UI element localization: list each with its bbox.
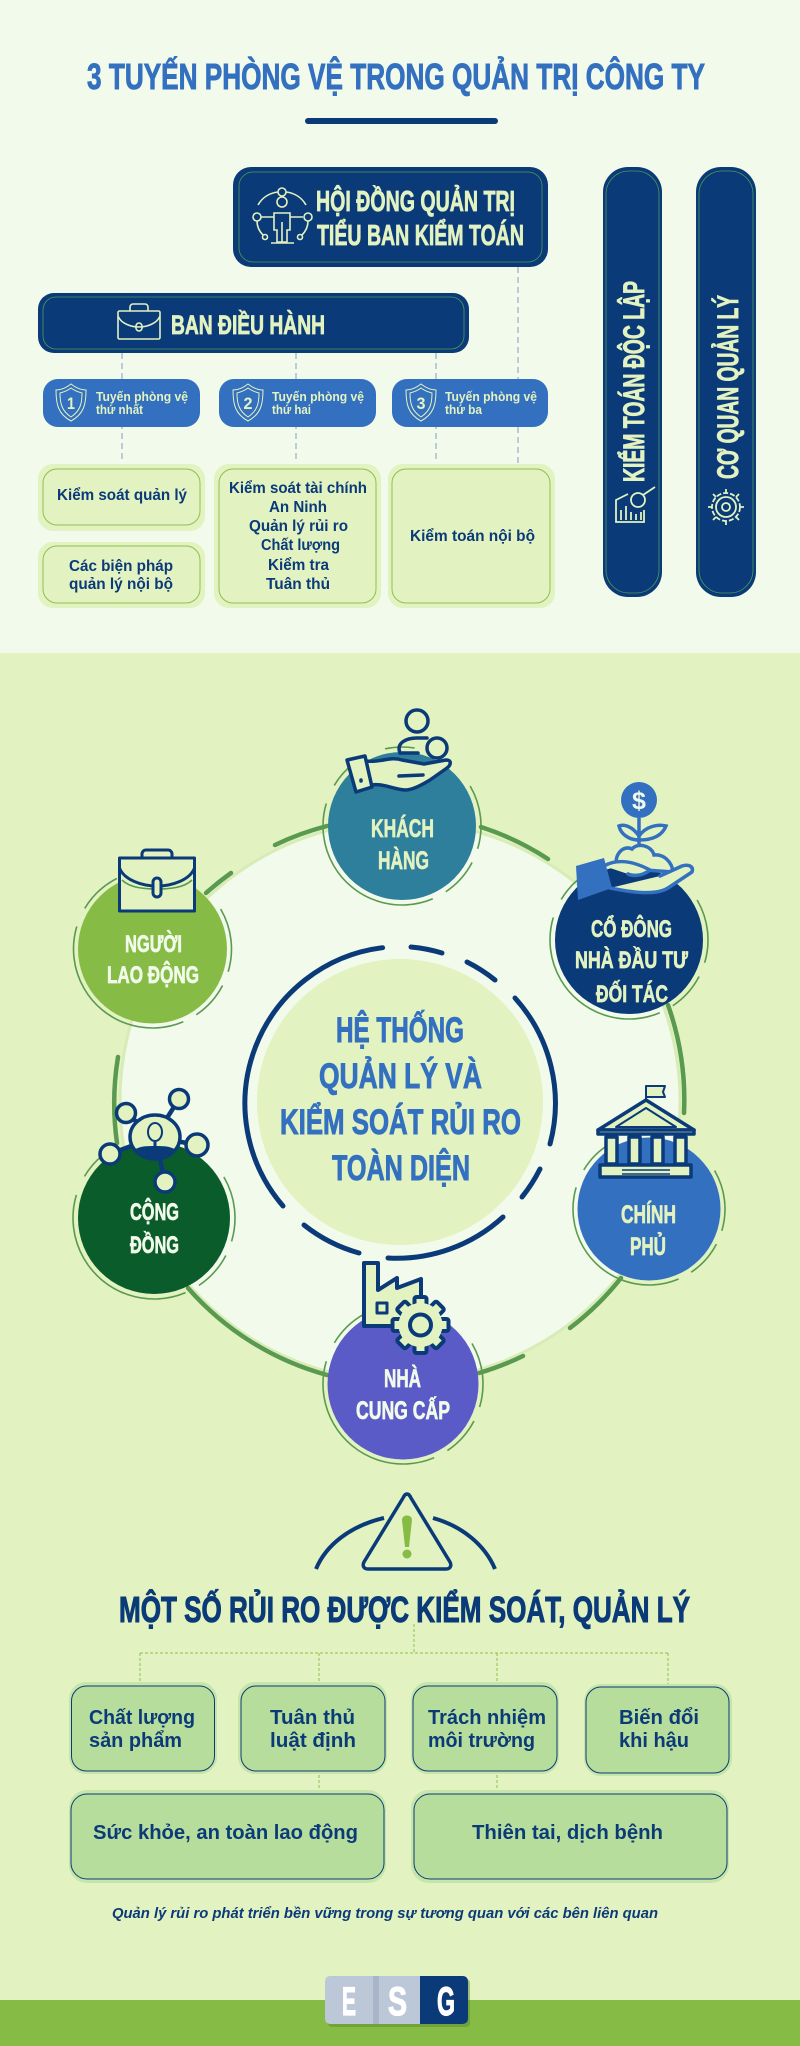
risk connector lines	[140, 1624, 668, 1790]
card: second line functions: Kiểm soát tài chính	[229, 480, 367, 497]
outer stakeholder ring	[114, 821, 684, 1381]
card: internal measures	[38, 542, 205, 608]
logo: ESG: S	[388, 1980, 407, 2024]
stakeholder: community: CỘNG	[130, 1198, 179, 1226]
icon: shield 1: 1	[67, 394, 75, 413]
risk: occupational health: Sức khỏe, an toàn lao động	[93, 1822, 358, 1844]
icon: shield 2	[233, 384, 263, 421]
title underline	[305, 118, 498, 124]
stakeholder: employees: LAO ĐỘNG	[107, 961, 199, 989]
label: line 3	[445, 389, 537, 417]
stakeholder: customers: HÀNG	[378, 846, 429, 875]
label: line 3: Tuyến phòng vệ	[445, 389, 537, 404]
risk: legal compliance: luật định	[270, 1730, 356, 1752]
stakeholder: suppliers: NHÀ	[384, 1364, 421, 1393]
label: line 1	[96, 389, 188, 417]
line pill 2	[219, 379, 376, 427]
stakeholder: customers	[294, 710, 510, 934]
card: second line functions: An Ninh	[269, 499, 327, 516]
card: internal audit: Kiểm toán nội bộ	[410, 528, 535, 545]
risk: climate change	[584, 1684, 732, 1776]
icon: shield 1	[56, 384, 86, 421]
central text: HỆ THỐNG	[336, 1010, 464, 1050]
stakeholder: shareholders: ĐỐI TÁC	[596, 980, 668, 1008]
label: regulator: CƠ QUAN QUẢN LÝ	[711, 295, 745, 479]
risk: legal compliance	[238, 1682, 387, 1774]
label: line 2: thứ hai	[272, 402, 311, 417]
connector lines	[122, 267, 518, 463]
panel: independent audit	[603, 167, 662, 597]
icon: briefcase	[120, 850, 194, 911]
line pill 1	[43, 379, 200, 427]
panel: executive board	[38, 293, 469, 353]
icon: factory and gear	[364, 1263, 448, 1353]
card: second line functions: Kiểm tra	[268, 557, 329, 574]
stakeholder: customers: KHÁCH	[371, 814, 434, 843]
stakeholder: government	[545, 1086, 753, 1313]
central text: TOÀN DIỆN	[332, 1148, 470, 1188]
risk: environmental responsibility: môi trường	[428, 1730, 535, 1752]
stakeholder: community: ĐỒNG	[130, 1231, 179, 1259]
card: second line functions: Quản lý rủi ro	[249, 518, 348, 535]
risk: disasters and epidemics: Thiên tai, dịch bệnh	[472, 1822, 663, 1844]
card: management control: Kiểm soát quản lý	[57, 487, 187, 504]
stakeholder: suppliers: CUNG CẤP	[356, 1396, 450, 1425]
card: management control	[38, 464, 205, 531]
risk: product quality: Chất lượng	[89, 1707, 195, 1729]
card: internal measures: Các biện pháp	[69, 558, 173, 575]
icon: government building	[598, 1086, 694, 1177]
label: line 2: Tuyến phòng vệ	[272, 389, 364, 404]
risk: occupational health	[69, 1790, 386, 1883]
stakeholder: employees: NGƯỜI	[125, 930, 182, 958]
heading: board	[316, 184, 524, 252]
central text: QUẢN LÝ VÀ	[319, 1056, 482, 1096]
central text: KIỂM SOÁT RỦI RO	[280, 1102, 521, 1142]
label: independent audit: KIỂM TOÁN ĐỘC LẬP	[617, 281, 651, 482]
icon: warning triangle	[316, 1494, 495, 1569]
heading: executive board: BAN ĐIỀU HÀNH	[171, 309, 325, 340]
card: second line functions	[214, 464, 381, 608]
panel: regulator	[696, 167, 756, 597]
icon: shield 3	[406, 384, 436, 421]
icon: hand holding person	[347, 710, 450, 792]
panel: board of directors	[233, 167, 548, 267]
stakeholder: shareholders: CỔ ĐÔNG	[591, 915, 672, 943]
icon: person in network	[253, 188, 312, 243]
risk: product quality: sản phẩm	[89, 1730, 182, 1752]
icon: hand growing money	[576, 782, 692, 900]
stakeholder: government: CHÍNH	[621, 1200, 676, 1229]
logo: ESG: G	[437, 1980, 455, 2024]
line pill 3	[392, 379, 548, 427]
icon: chart and magnifier	[616, 487, 655, 522]
risk: environmental responsibility	[411, 1682, 559, 1774]
central text	[280, 1010, 521, 1188]
stakeholder: employees	[45, 841, 260, 1057]
label: line 1: thứ nhất	[96, 402, 144, 417]
icon: community network	[100, 1090, 208, 1192]
stakeholder: government: PHỦ	[630, 1231, 666, 1261]
card: second line functions: Tuân thủ	[266, 576, 330, 593]
central circle	[245, 947, 555, 1258]
label: line 2	[272, 389, 364, 417]
icon: hand growing money: $	[632, 787, 646, 815]
risk: environmental responsibility: Trách nhiệm	[428, 1707, 546, 1729]
stakeholder: shareholders	[521, 782, 737, 1048]
risk: climate change: khi hậu	[619, 1730, 689, 1752]
label: line 3: thứ ba	[445, 402, 483, 417]
icon: shield 3: 3	[416, 394, 426, 413]
logo: ESG: E	[342, 1980, 356, 2024]
caption: Quản lý rủi ro phát triển bền vững trong sự tương quan với các bên liên quan	[112, 1905, 658, 1922]
risk: product quality	[69, 1682, 217, 1774]
card: second line functions: Chất lượng	[261, 537, 340, 554]
icon: gear	[708, 489, 744, 525]
stakeholder: shareholders: NHÀ ĐẦU TƯ	[575, 946, 688, 974]
risk: climate change: Biến đổi	[619, 1707, 699, 1729]
logo: ESG	[325, 1976, 470, 2027]
icon: shield 2: 2	[244, 394, 252, 413]
risk: legal compliance: Tuân thủ	[270, 1707, 355, 1729]
icon: briefcase	[118, 304, 160, 339]
card: internal audit	[388, 464, 555, 608]
card: internal measures: quản lý nội bộ	[69, 576, 173, 593]
stakeholder: suppliers	[294, 1263, 512, 1493]
risk: disasters and epidemics	[411, 1790, 729, 1883]
heading: board: TIỂU BAN KIỂM TOÁN	[317, 218, 524, 252]
stakeholder: community	[43, 1090, 265, 1329]
label: line 1: Tuyến phòng vệ	[96, 389, 188, 404]
heading: board: HỘI ĐỒNG QUẢN TRỊ	[316, 184, 515, 218]
